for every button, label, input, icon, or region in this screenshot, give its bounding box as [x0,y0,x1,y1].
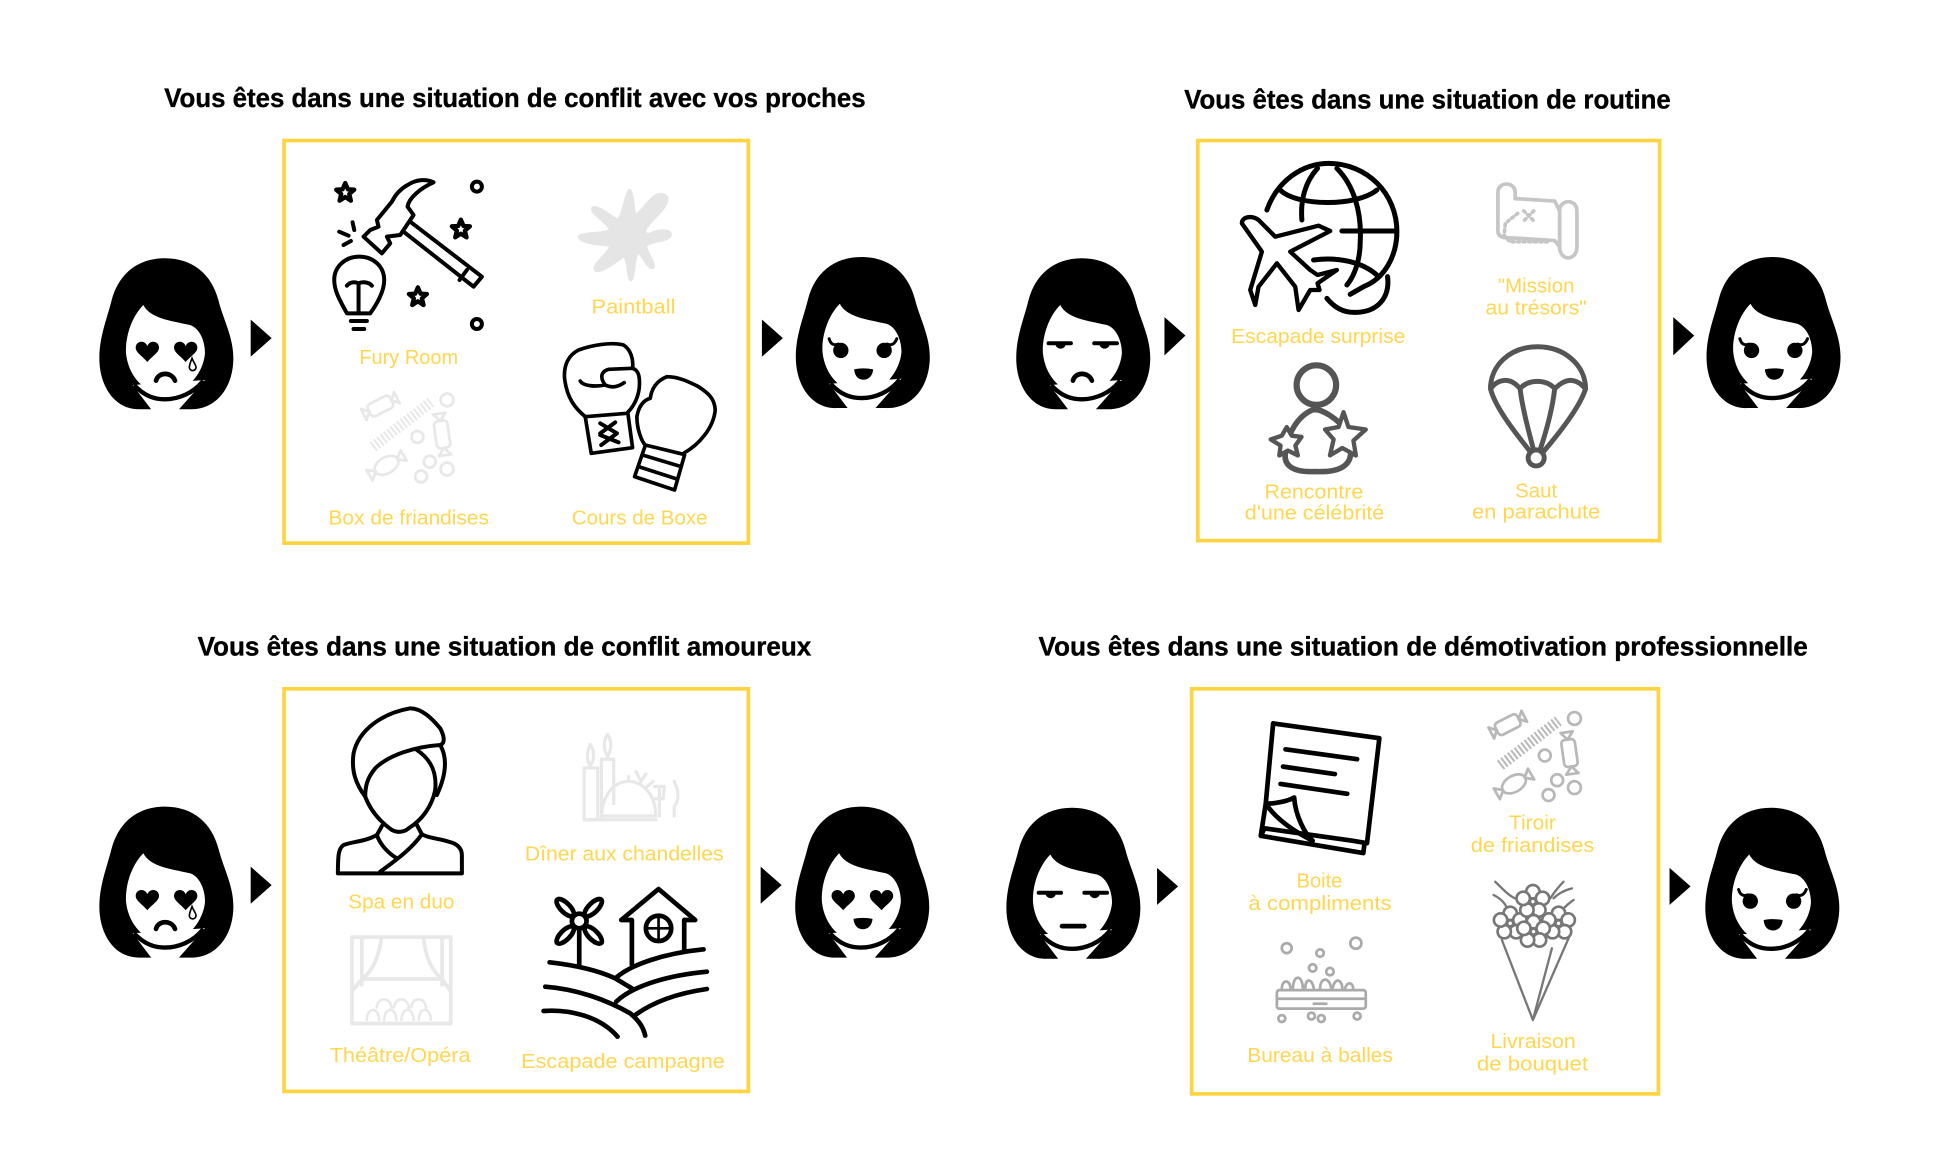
label: de friandises [1471,835,1594,857]
face: happy [796,257,930,409]
panel: conflit avec vos proches [99,82,930,543]
icon: woman in towel [338,708,462,873]
label: Saut [1515,480,1558,502]
label: Théâtre/Opéra [330,1045,471,1067]
label: Fury Room [359,347,458,369]
icon: countryside [544,889,707,1037]
label: Escapade campagne [521,1051,725,1073]
label: Livraison [1490,1031,1576,1053]
panel: démotivation professionnelle [1006,630,1839,1094]
label: Spa en duo [348,892,454,914]
label: Boite [1297,871,1342,893]
label: à compliments [1248,893,1392,915]
label: Tiroir [1509,813,1556,835]
icon: boxing gloves [564,344,715,490]
face: sad with hearts and tear [99,258,233,410]
arrow [1670,868,1691,905]
face: bored, flat mouth [1006,808,1140,959]
icon: globe and plane [1242,163,1397,312]
face: hearts and smile [795,807,929,958]
heading: Vous êtes dans une situation de démotivation professionnelle [1039,630,1808,661]
icon: candlelit dinner [584,735,678,820]
icon: hammer and bulb [334,180,482,329]
panel: conflit amoureux [99,630,929,1091]
face: happy [1705,808,1839,959]
face: happy [1707,257,1841,409]
label: "Mission [1498,275,1574,297]
arrow [251,867,272,904]
heading: Vous êtes dans une situation de conflit amoureux [198,630,811,661]
options box [1192,689,1658,1094]
label: Dîner aux chandelles [525,843,724,865]
label: Paintball [592,296,675,318]
label: d'une célébrité [1245,503,1384,525]
label: de bouquet [1477,1053,1588,1075]
icon: paintball splat [578,189,672,281]
icon: desk with balls [1277,938,1366,1022]
label: en parachute [1472,501,1600,523]
arrow [1164,317,1185,355]
icon: note [1261,723,1379,853]
heading: Vous êtes dans une situation de conflit avec vos proches [164,82,866,113]
icon: candies [361,392,453,482]
label: au trésors" [1486,298,1587,320]
options box [284,141,748,543]
label: Escapade surprise [1231,326,1405,348]
icon: candies [1488,710,1581,801]
options box [284,689,748,1091]
arrow [762,320,783,357]
icon: bouquet [1494,882,1575,1020]
label: Bureau à balles [1247,1045,1393,1067]
face: sad with hearts and tear [99,807,233,958]
panel: routine [1016,83,1841,541]
label: Cours de Boxe [572,508,708,530]
icon: treasure map [1498,184,1577,258]
options box [1198,141,1660,541]
face: bored [1016,258,1150,410]
arrow [761,867,782,904]
arrow [1673,317,1694,355]
icon: parachute [1490,347,1586,466]
label: Box de friandises [328,508,489,530]
icon: celebrity [1271,365,1366,472]
heading: Vous êtes dans une situation de routine [1184,83,1671,114]
icon: theatre [352,937,451,1023]
arrow [1157,868,1178,905]
arrow [251,320,272,357]
label: Rencontre [1265,482,1363,504]
